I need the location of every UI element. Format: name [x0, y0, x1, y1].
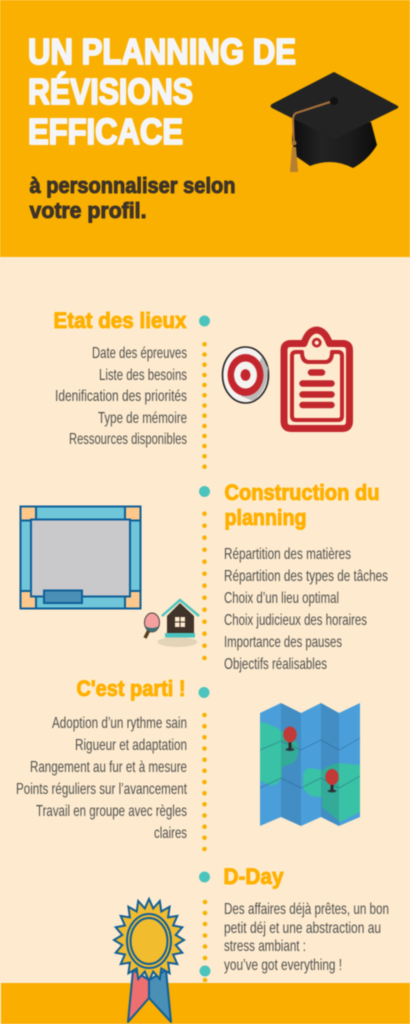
text block: c'est parti: Rigueur et adaptation — [75, 737, 187, 754]
icon: graduation cap — [270, 72, 398, 172]
text block: c'est parti: claires — [154, 825, 187, 842]
heading: construction du planning: Construction du — [224, 480, 380, 505]
text block: c'est parti: Adoption d’un rythme sain — [52, 715, 187, 732]
icon: map — [260, 703, 360, 826]
title: RÉVISIONS — [28, 71, 193, 112]
heading: d-day: D-Day — [224, 864, 284, 889]
text block: etat des lieux: Idenification des priorités — [55, 388, 187, 405]
marker: d-day — [199, 872, 210, 882]
dotted line: etat des lieux — [202, 342, 207, 469]
text block: construction du planning: Importance des pauses — [224, 634, 342, 651]
heading: etat des lieux: Etat des lieux — [54, 308, 187, 333]
text block: etat des lieux: Type de mémoire — [98, 410, 187, 427]
marker: construction du planning — [199, 486, 210, 497]
icon: ping-pong paddle — [144, 613, 160, 638]
icon: target — [222, 347, 268, 403]
text block: c'est parti — [16, 715, 187, 842]
marker: c'est parti — [198, 687, 210, 698]
text block: etat des lieux — [55, 345, 187, 448]
heading: construction du planning — [224, 480, 380, 530]
dotted line: construction du planning — [202, 511, 207, 660]
subtitle: à personnaliser selon — [30, 173, 236, 198]
text block: d-day — [224, 901, 389, 974]
end marker: d-day — [200, 966, 210, 976]
icon: house — [158, 600, 199, 647]
subtitle — [30, 173, 236, 223]
dotted line: d-day — [203, 900, 207, 982]
heading: construction du planning: planning — [224, 505, 306, 530]
title — [28, 31, 296, 152]
panel: construction du planning — [20, 480, 388, 673]
panel: d-day — [114, 864, 389, 1022]
icon: clipboard — [284, 330, 350, 428]
text block: construction du planning: Choix d’un lieu optimal — [224, 590, 339, 607]
title: EFFICACE — [28, 111, 183, 152]
heading: c'est parti: C'est parti ! — [76, 676, 186, 701]
text block: d-day: you’ve got everything ! — [224, 957, 342, 974]
header band — [0, 0, 410, 257]
title: UN PLANNING DE — [28, 31, 296, 72]
text block: construction du planning — [224, 546, 388, 673]
text block: etat des lieux: Ressources disponibles — [69, 431, 187, 448]
text block: construction du planning: Objectifs réalisables — [224, 656, 327, 673]
text block: c'est parti: Rangement au fur et à mesure — [30, 759, 187, 776]
text block: c'est parti: Points réguliers sur l’avancement — [16, 781, 187, 798]
text block: etat des lieux: Liste des besoins — [99, 367, 187, 384]
icon: board — [20, 506, 140, 608]
panel: etat des lieux — [54, 308, 350, 469]
text block: construction du planning: Répartition des matières — [224, 546, 351, 563]
dotted line: c'est parti — [202, 713, 207, 851]
subtitle: votre profil. — [30, 198, 146, 223]
text block: etat des lieux: Date des épreuves — [92, 345, 187, 362]
icon: rosette — [114, 899, 184, 1022]
text block: d-day: stress ambiant : — [224, 938, 306, 955]
text block: c'est parti: Travail en groupe avec règles — [36, 803, 187, 820]
panel: c'est parti — [16, 676, 360, 851]
footer band — [1, 983, 410, 1024]
marker: etat des lieux — [199, 316, 210, 326]
